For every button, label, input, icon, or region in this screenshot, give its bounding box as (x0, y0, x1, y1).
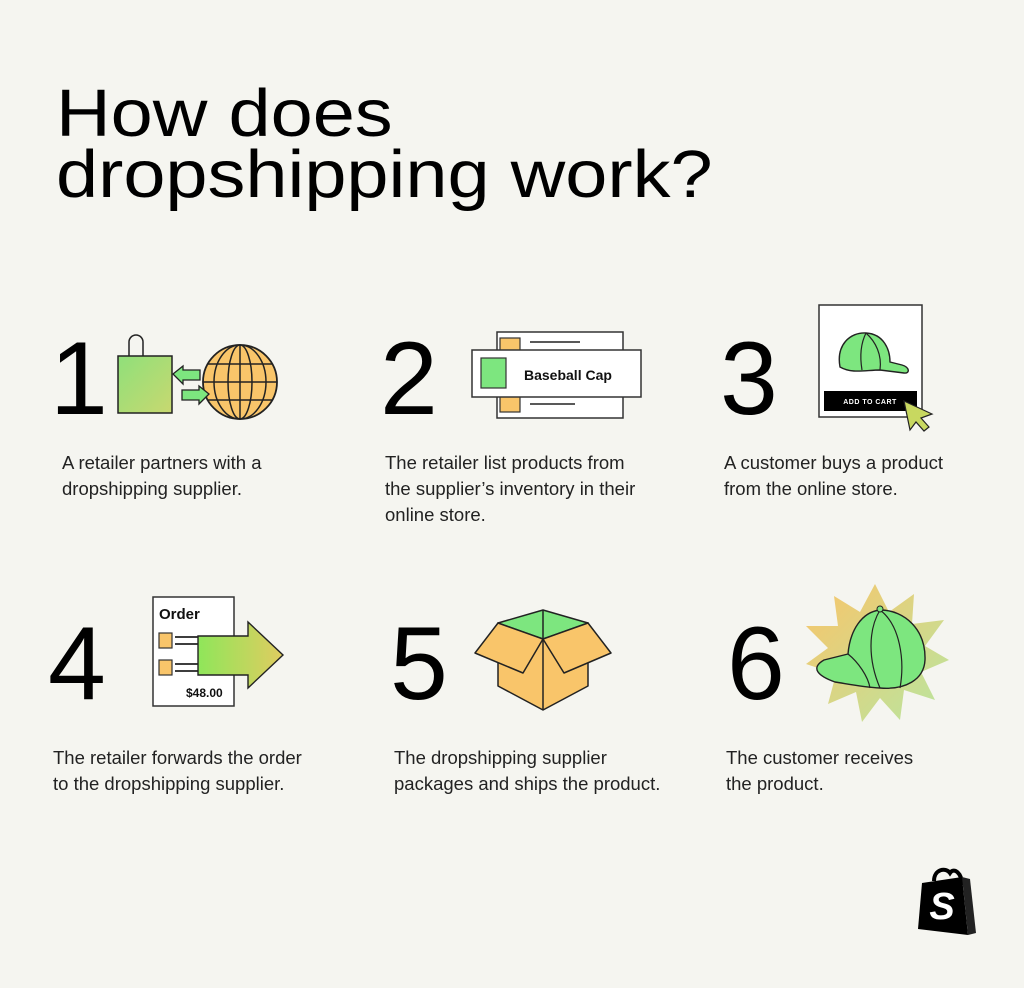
icon: order forward: $48.00 (186, 686, 223, 700)
text 5: The dropshipping supplier (394, 747, 607, 768)
text 5: packages and ships the product. (394, 773, 660, 794)
text 6: the product. (726, 773, 824, 794)
logo: shopify bag (918, 868, 976, 935)
title (56, 76, 713, 212)
text 5 (394, 747, 660, 794)
text 4: The retailer forwards the order (53, 747, 302, 768)
number 2: 2 (380, 321, 438, 437)
step 4 (48, 596, 302, 794)
step 1 (50, 321, 278, 499)
icon: bag and globe (117, 334, 278, 420)
icon: order forward: Order (159, 606, 200, 623)
text 2 (385, 452, 635, 525)
title: dropshipping work? (56, 137, 713, 212)
text 2: the supplier’s inventory in their (385, 478, 635, 499)
number 3: 3 (720, 321, 778, 437)
step 6 (726, 584, 949, 794)
icon: order forward (152, 596, 284, 707)
text 6 (726, 747, 913, 794)
number 4: 4 (48, 606, 106, 722)
icon: product listing: Baseball Cap (524, 367, 612, 383)
text 3: from the online store. (724, 478, 898, 499)
step 5 (390, 606, 660, 794)
logo: shopify bag: S (929, 886, 955, 928)
title: How does (56, 76, 393, 151)
step 3 (720, 304, 943, 499)
icon: add to cart: ADD TO CART (843, 399, 897, 406)
text 2: online store. (385, 504, 486, 525)
text 3: A customer buys a product (724, 452, 943, 473)
text 1: A retailer partners with a (62, 452, 261, 473)
text 2: The retailer list products from (385, 452, 625, 473)
number 6: 6 (727, 606, 785, 722)
icon: open box (474, 609, 612, 711)
number 5: 5 (390, 606, 448, 722)
icon: add to cart (818, 304, 934, 432)
text 3 (724, 452, 943, 499)
text 1 (62, 452, 262, 499)
text 6: The customer receives (726, 747, 913, 768)
icon: product listing (471, 331, 642, 419)
text 4 (53, 747, 302, 794)
text 4: to the dropshipping supplier. (53, 773, 284, 794)
number 1: 1 (50, 321, 108, 437)
text 1: dropshipping supplier. (62, 478, 242, 499)
icon: cap with starburst (806, 584, 949, 722)
step 2 (380, 321, 642, 525)
